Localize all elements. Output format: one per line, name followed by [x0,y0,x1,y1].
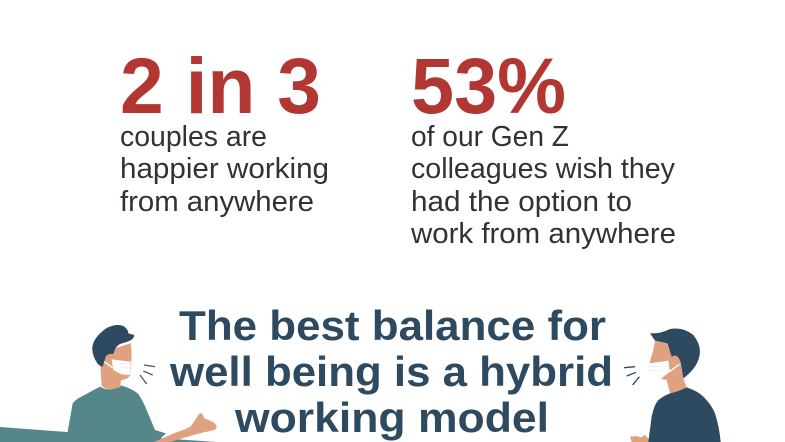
stat: 53% of Gen Z [410,41,676,250]
mask strap [669,364,679,372]
illustration: right man with mask [624,328,721,442]
mask fold lines [119,363,131,368]
stat text: couples [120,121,329,218]
stat text: Gen Z: work from anywhere [410,218,676,250]
title: well being is a hybrid [169,348,613,395]
body: navy shirt [648,387,721,442]
stat text: couples: couples are [120,121,267,153]
mask [112,359,131,375]
mask [649,361,670,379]
head and neck [649,341,687,393]
title [169,302,613,441]
stat text: couples: from anywhere [120,186,314,218]
stat text: Gen Z: of our Gen Z [411,121,569,153]
arm and hand [154,413,217,442]
mask fold lines [649,366,661,371]
big number: 53%: 53% [411,41,566,130]
hand [630,435,649,442]
stat text: couples: happier working [120,153,329,185]
big number: 2 in 3: 2 in 3 [120,41,321,130]
stat text: Gen Z: colleagues wish they [411,153,676,185]
hair [92,325,134,367]
title: The best balance for [179,302,606,349]
mask strap [104,362,113,368]
stat text: Gen Z: had the option to [411,186,632,218]
speech lines [624,367,639,385]
head and neck [100,343,132,389]
stat text: Gen Z [410,121,676,250]
illustration: left man with mask [67,325,166,442]
body: teal shirt [67,386,166,442]
hair [650,328,700,378]
stat: 2 in 3 couples [120,41,329,218]
floor band [0,427,217,442]
title: working model [234,394,549,441]
speech lines [140,365,155,384]
